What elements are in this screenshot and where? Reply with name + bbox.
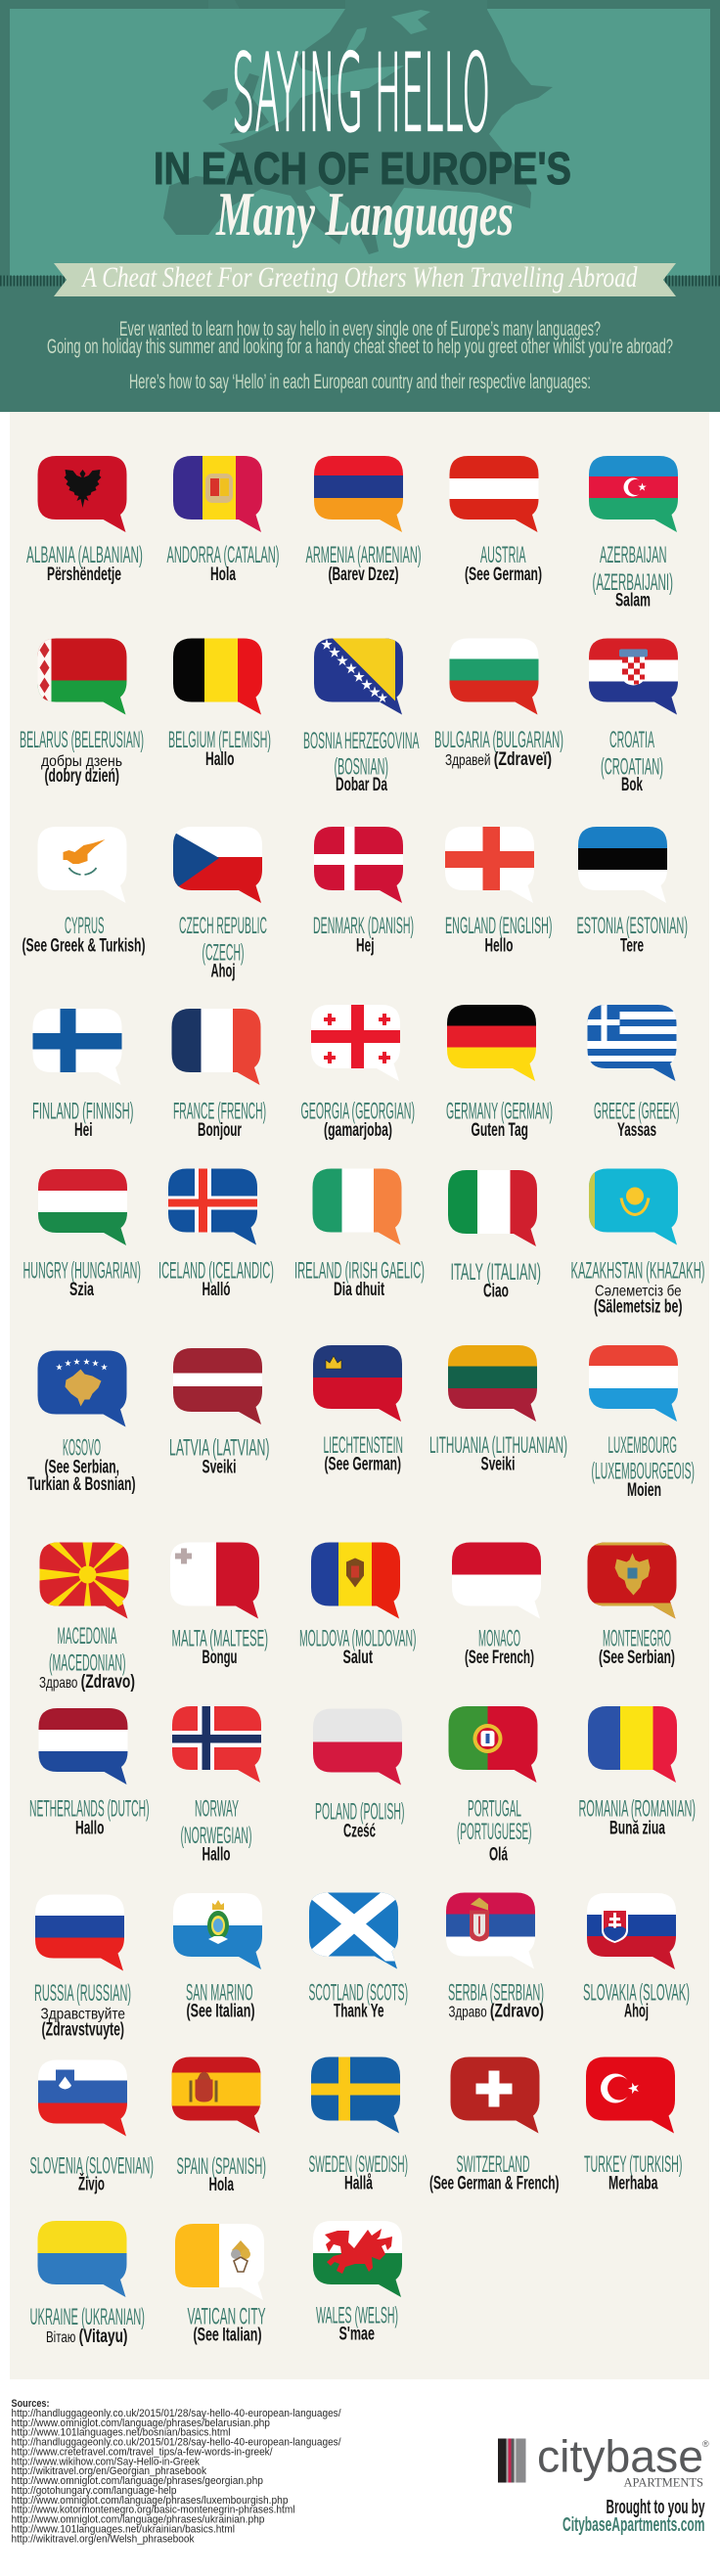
card: Czech Republic xyxy=(173,827,267,982)
flag: Greece xyxy=(587,1005,677,1081)
sources: http://gotohungary.com/language-help xyxy=(12,2485,177,2497)
card: Italy xyxy=(448,1170,541,1301)
card: Bulgaria xyxy=(434,638,563,770)
greeting: Belarus xyxy=(41,753,122,787)
text: BOSNIA HERZEGOVINA xyxy=(303,728,419,754)
flag: Bulgaria xyxy=(450,638,538,714)
greeting: Vatican City: (See Italian) xyxy=(194,2325,262,2346)
greeting: Albania: Përshëndetje xyxy=(47,565,121,585)
card: Iceland xyxy=(158,1168,274,1300)
text: SERBIA (SERBIAN) xyxy=(448,1980,544,2006)
greeting: Azerbaijan: Salam xyxy=(615,591,651,610)
greeting: Serbia: Здраво (Zdravo) xyxy=(448,2002,544,2021)
card: Monaco xyxy=(452,1542,541,1668)
flag: Malta xyxy=(170,1542,259,1618)
greeting: Sweden: Hallå xyxy=(344,2174,373,2193)
text: ALBANIA (ALBANIAN) xyxy=(26,542,143,568)
flag: Denmark xyxy=(314,827,403,903)
greeting: Norway: Hallo xyxy=(202,1845,231,1865)
greeting: Kosovo: (See Serbian, xyxy=(45,1458,119,1477)
greeting: Latvia: Sveiki xyxy=(202,1458,237,1477)
greeting: Monaco: (See French) xyxy=(465,1648,534,1668)
greeting: Romania: Bună ziua xyxy=(609,1818,665,1839)
text: (PORTUGUESE) xyxy=(457,1819,532,1845)
card: Montenegro xyxy=(587,1542,677,1668)
greeting: Kosovo: Turkian & Bosnian) xyxy=(27,1474,135,1495)
flag: Kosovo xyxy=(37,1350,127,1426)
sources: http://www.101languages.net/ukrainian/basics.html xyxy=(12,2523,235,2535)
label: Norway xyxy=(180,1796,252,1849)
card: Moldova xyxy=(299,1542,417,1668)
text: HUNGRY (HUNGARIAN) xyxy=(23,1258,141,1284)
sources: Sources: xyxy=(12,2398,49,2410)
text: RUSSIA (RUSSIAN) xyxy=(34,1980,131,2007)
flag: Belarus xyxy=(37,638,127,714)
sources: http://handluggageonly.co.uk/2015/01/28/say-hello-40-european-languages/ xyxy=(12,2437,341,2449)
card: Albania xyxy=(26,456,143,585)
card: Belgium xyxy=(168,638,271,770)
flag: Macedonia xyxy=(39,1542,129,1618)
card: Wales xyxy=(313,2221,402,2344)
map of Europe xyxy=(163,0,553,254)
text: SWEDEN (SWEDISH) xyxy=(309,2151,408,2178)
flag: Lithuania xyxy=(448,1345,537,1422)
greeting: Cyprus: (See Greek & Turkish) xyxy=(22,935,145,957)
logo subtitle: APARTMENTS xyxy=(624,2475,703,2489)
greeting: Greece: Yassas xyxy=(617,1120,656,1141)
sources: http://www.omniglot.com/language/phrases/ukrainian.php xyxy=(12,2514,265,2526)
text: MOLDOVA (MOLDOVAN) xyxy=(299,1626,417,1651)
label: Czech Republic xyxy=(179,913,267,967)
card: Kazakhstan xyxy=(571,1168,704,1317)
card: Cyprus xyxy=(22,827,145,957)
greeting: Croatia: Bok xyxy=(621,775,643,795)
sources: http://www.wikihow.com/Say-Hello-in-Greek xyxy=(12,2456,201,2467)
greeting: Bulgaria: Здравей (Zdraveï) xyxy=(445,749,552,770)
flag: Bosnia xyxy=(314,638,403,714)
text: DENMARK (DANISH) xyxy=(313,913,414,939)
title: Many Languages: Many Languages xyxy=(215,179,514,249)
greeting: Russia: Здравствуйте xyxy=(41,2006,125,2023)
flag: Czech Republic xyxy=(173,827,262,903)
text: FINLAND (FINNISH) xyxy=(32,1098,133,1125)
flag: Netherlands xyxy=(39,1708,127,1785)
card: Russia xyxy=(34,1894,131,2041)
flag: Austria xyxy=(450,456,538,532)
text: NETHERLANDS (DUTCH) xyxy=(29,1796,149,1822)
flag: Sweden xyxy=(311,2056,400,2133)
card: Ireland xyxy=(294,1168,425,1300)
text: WALES (WELSH) xyxy=(316,2303,398,2328)
flag: Romania xyxy=(588,1706,677,1783)
card: Slovenia xyxy=(29,2060,154,2195)
card: Kosovo xyxy=(27,1350,135,1495)
flag: Kazakhstan xyxy=(589,1168,678,1244)
card: Vatican City xyxy=(175,2224,266,2346)
greeting: Kazakhstan: Сәлеметсіз бе xyxy=(595,1284,682,1299)
card: Spain xyxy=(172,2056,266,2195)
greeting: Hungary: Szia xyxy=(69,1280,94,1300)
greeting: Netherlands: Hallo xyxy=(75,1818,104,1839)
card: Kosovo: KOSOVO xyxy=(63,1434,101,1462)
greeting: Czech: Ahoj xyxy=(211,961,235,982)
greeting: Liechtenstein: (See German) xyxy=(325,1454,401,1475)
flag: Slovakia xyxy=(587,1893,676,1969)
flag: Ukraine xyxy=(37,2221,127,2297)
card: Finland xyxy=(32,1009,133,1141)
greeting: Armenia: (Barev Dzez) xyxy=(329,565,399,585)
card: Lithuania xyxy=(429,1345,567,1475)
card: Denmark xyxy=(313,827,414,957)
card: Poland xyxy=(313,1708,405,1841)
text: SCOTLAND (SCOTS) xyxy=(309,1980,408,2006)
greeting: Ireland: Dia dhuit xyxy=(334,1280,384,1300)
greeting: Finland: Hei xyxy=(74,1120,92,1141)
greeting: Belgium: Hallo xyxy=(205,749,235,770)
card: Liechtenstein xyxy=(313,1345,403,1475)
card: France xyxy=(172,1009,266,1141)
flag: France xyxy=(172,1009,260,1085)
greeting: Kazakhstan xyxy=(594,1284,683,1317)
sources: http://www.omniglot.com/language/phrases/georgian.php xyxy=(12,2475,263,2487)
text: SPAIN (SPANISH) xyxy=(176,2153,266,2180)
flag: England xyxy=(445,827,534,903)
greeting: Slovenia: Živjo xyxy=(78,2174,105,2195)
greeting: Poland: Cześć xyxy=(343,1822,376,1841)
greeting: Slovakia: Ahoj xyxy=(624,2002,649,2021)
sources: http://wikitravel.org/en/Georgian_phrasebook xyxy=(12,2465,207,2477)
text: LIECHTENSTEIN xyxy=(323,1432,403,1459)
greeting: Andorra: Hola xyxy=(210,565,236,585)
logo wordmark: citybase xyxy=(537,2430,703,2481)
greeting: Georgia: (gamarjoba) xyxy=(324,1120,392,1141)
panel: countries xyxy=(10,412,709,2379)
flag: Norway xyxy=(172,1706,261,1783)
card: Georgia xyxy=(301,1005,415,1141)
card: Croatia xyxy=(589,638,678,795)
label: Azerbaijan xyxy=(593,542,673,596)
card: Armenia xyxy=(305,456,421,585)
card: Azerbaijan xyxy=(589,456,678,610)
card: Belarus xyxy=(20,638,144,787)
text: CZECH REPUBLIC xyxy=(179,913,267,939)
text: MALTA (MALTESE) xyxy=(172,1626,268,1651)
flag: Scotland xyxy=(309,1888,398,1968)
greeting: Turkey: Merhaba xyxy=(608,2174,658,2193)
label: Portugal xyxy=(457,1796,532,1845)
greeting: Russia xyxy=(41,2006,125,2041)
greeting: Portugal: Olá xyxy=(489,1845,508,1865)
card: Scotland xyxy=(309,1888,408,2021)
text: (NORWEGIAN) xyxy=(180,1823,252,1849)
flag: Spain xyxy=(172,2056,260,2133)
greeting: Germany: Guten Tag xyxy=(472,1120,528,1141)
flag: San Marino xyxy=(173,1893,262,1969)
label: Bosnia Herzegovina: (BOSNIAN) xyxy=(335,753,388,781)
text: POLAND (POLISH) xyxy=(315,1798,405,1826)
flag: Hungary xyxy=(38,1169,127,1245)
card: Cyprus: CYPRUS xyxy=(65,913,104,939)
card: Romania xyxy=(579,1706,696,1839)
card: Germany xyxy=(446,1005,553,1141)
card: Estonia xyxy=(577,827,688,957)
label: Norway: NORWAY xyxy=(195,1796,239,1822)
card: Monaco: MONACO xyxy=(478,1626,520,1651)
card: Switzerland xyxy=(429,2056,560,2193)
flag: Azerbaijan xyxy=(589,456,678,532)
flag: Cyprus xyxy=(37,827,127,903)
greeting: Macedonia: Здраво (Zdravo) xyxy=(39,1672,135,1693)
flag: Albania xyxy=(37,456,127,532)
flag: Poland xyxy=(313,1708,402,1785)
label: Latvia: LATVIA (LATVIAN) xyxy=(169,1434,270,1462)
flag: Belgium xyxy=(173,638,262,714)
flag: Ireland xyxy=(313,1168,401,1244)
flag: Georgia xyxy=(311,1005,400,1081)
flag: Portugal xyxy=(448,1706,538,1783)
text: VATICAN CITY xyxy=(188,2303,266,2330)
greeting: Denmark: Hej xyxy=(356,935,374,957)
card: Macedonia: MACEDONIA xyxy=(57,1623,117,1650)
greeting: Spain: Hola xyxy=(209,2175,234,2195)
label: Luxembourg xyxy=(591,1432,695,1485)
text: UKRAINE (UKRANIAN) xyxy=(29,2304,145,2330)
flag: Vatican City xyxy=(175,2224,264,2300)
greeting: Russia: (Zdravstvuyte) xyxy=(41,2019,124,2041)
logo registered mark: ® xyxy=(702,2439,709,2449)
text: (MACEDONIAN) xyxy=(49,1650,125,1677)
flag: Wales xyxy=(313,2221,402,2297)
flag: Armenia xyxy=(314,456,403,532)
title: In each of Europe's: IN EACH OF EUROPE'S xyxy=(154,143,571,194)
card: Switzerland: SWITZERLAND xyxy=(456,2151,530,2178)
text: GEORGIA (GEORGIAN) xyxy=(301,1098,415,1125)
greeting: Malta: Bongu xyxy=(202,1648,237,1668)
card: Latvia xyxy=(169,1348,270,1477)
banner ribbon xyxy=(54,261,676,296)
flag: Germany xyxy=(447,1005,536,1082)
greeting: Switzerland: (See German & French) xyxy=(429,2174,560,2193)
label: Macedonia xyxy=(49,1623,125,1677)
card: Hungary xyxy=(23,1169,141,1300)
flag: Slovenia xyxy=(38,2060,127,2137)
flag: Andorra xyxy=(173,456,262,532)
sources: http://wikitravel.org/en/Welsh_phrasebook xyxy=(12,2533,195,2545)
greeting: Austria: (See German) xyxy=(465,565,542,585)
greeting: Lithuania: Sveiki xyxy=(481,1454,515,1475)
sources: http://www.101languages.net/bosnian/basics.html xyxy=(12,2427,231,2439)
text: ANDORRA (CATALAN) xyxy=(166,542,280,568)
label: Czech Republic: (CZECH) xyxy=(202,939,245,967)
flag: Iceland xyxy=(168,1168,257,1244)
greeting: Iceland: Halló xyxy=(202,1280,231,1300)
greeting: Italy: Ciao xyxy=(483,1282,509,1301)
flag: Estonia xyxy=(578,827,667,903)
text: ENGLAND (ENGLISH) xyxy=(445,913,552,939)
card: San Marino: SAN MARINO xyxy=(186,1980,252,2006)
label: Bosnia Herzegovina xyxy=(303,728,419,781)
intro text xyxy=(47,317,673,393)
card: Portugal xyxy=(448,1706,538,1865)
greeting: Ukraine: Вітаю (Vitayu) xyxy=(46,2327,127,2347)
flag: Switzerland xyxy=(450,2056,540,2133)
sources xyxy=(12,2398,341,2545)
label: Croatia: CROATIA xyxy=(609,727,654,753)
flag: Montenegro xyxy=(587,1542,677,1618)
greeting: Bosnia: Dobar Da xyxy=(336,775,387,795)
flag: Russia xyxy=(35,1894,124,1970)
greeting: Belarus: добры дзень xyxy=(41,753,122,770)
card: Portugal: PORTUGAL xyxy=(468,1796,521,1822)
flag: Luxembourg xyxy=(589,1345,678,1422)
card: Norway xyxy=(172,1706,261,1865)
text: BELARUS (BELERUSIAN) xyxy=(20,727,144,753)
text: LITHUANIA (LITHUANIAN) xyxy=(429,1432,567,1459)
greeting: Scotland: Thank Ye xyxy=(334,2002,383,2021)
card: Macedonia xyxy=(39,1542,135,1693)
sources: http://www.omniglot.com/language/phrases/luxembourgish.php xyxy=(12,2495,289,2507)
greeting: Belarus: (dobry dzień) xyxy=(45,766,119,787)
flag: Croatia xyxy=(589,638,678,714)
text: BULGARIA (BULGARIAN) xyxy=(434,727,563,753)
card: Greece xyxy=(587,1005,679,1141)
label: Italy: ITALY (ITALIAN) xyxy=(450,1259,541,1286)
flag: Moldova xyxy=(311,1542,400,1618)
card: Netherlands xyxy=(29,1708,149,1839)
text: FRANCE (FRENCH) xyxy=(173,1098,266,1125)
greeting: Wales: S'mae xyxy=(338,2325,375,2344)
sources: http://handluggageonly.co.uk/2015/01/28/say-hello-40-european-languages/ xyxy=(12,2408,341,2419)
card: Austria: AUSTRIA xyxy=(480,542,526,568)
text: SLOVENIA (SLOVENIAN) xyxy=(29,2152,154,2180)
logo: citybase apartments xyxy=(498,2430,709,2489)
sources: http://www.cretetravel.com/travel_tips/a-few-words-in-greek/ xyxy=(12,2446,273,2458)
sources: http://www.kotormontenegro.org/basic-montenegrin-phrases.html xyxy=(12,2505,295,2516)
greeting: San Marino: (See Italian) xyxy=(186,2002,254,2021)
card: Slovakia xyxy=(583,1893,690,2021)
label: Croatia xyxy=(601,727,663,781)
card: Ukraine xyxy=(29,2221,145,2347)
card: Luxembourg xyxy=(589,1345,695,1501)
flag: Serbia xyxy=(446,1892,535,1968)
greeting: France: Bonjour xyxy=(198,1120,242,1141)
card: England xyxy=(445,827,552,957)
text: IRELAND (IRISH GAELIC) xyxy=(294,1258,425,1284)
greeting: Luxembourg: Moien xyxy=(627,1480,661,1501)
card: Turkey xyxy=(584,2056,683,2193)
greeting: Estonia: Tere xyxy=(620,935,644,957)
flag: Italy xyxy=(448,1170,537,1246)
card: Austria xyxy=(450,456,542,585)
text: BELGIUM (FLEMISH) xyxy=(168,727,271,753)
sources: http://www.omniglot.com/language/phrases/belarusian.php xyxy=(12,2418,270,2429)
text: ARMENIA (ARMENIAN) xyxy=(305,542,421,568)
flag: Finland xyxy=(33,1009,121,1085)
flag: Monaco xyxy=(452,1542,541,1618)
flag: Liechtenstein xyxy=(313,1345,402,1422)
card: San Marino xyxy=(173,1893,262,2021)
greeting: Kosovo xyxy=(27,1458,135,1495)
logo bars xyxy=(498,2438,526,2483)
flag: Latvia xyxy=(173,1348,262,1424)
flag: Turkey xyxy=(586,2056,675,2133)
text: ICELAND (ICELANDIC) xyxy=(158,1258,274,1284)
card: Andorra xyxy=(166,456,280,585)
greeting: England: Hello xyxy=(485,935,513,957)
header background xyxy=(0,0,720,412)
card: Serbia xyxy=(446,1892,544,2021)
text: GERMANY (GERMAN) xyxy=(446,1098,553,1125)
card: Sweden xyxy=(309,2056,408,2193)
greeting: Montenegro: (See Serbian) xyxy=(599,1648,675,1668)
greeting: Moldova: Salut xyxy=(342,1648,373,1668)
card: Bosnia Herzegovina xyxy=(303,638,419,795)
card: Malta xyxy=(170,1542,268,1668)
ribbon stitches xyxy=(0,276,720,286)
